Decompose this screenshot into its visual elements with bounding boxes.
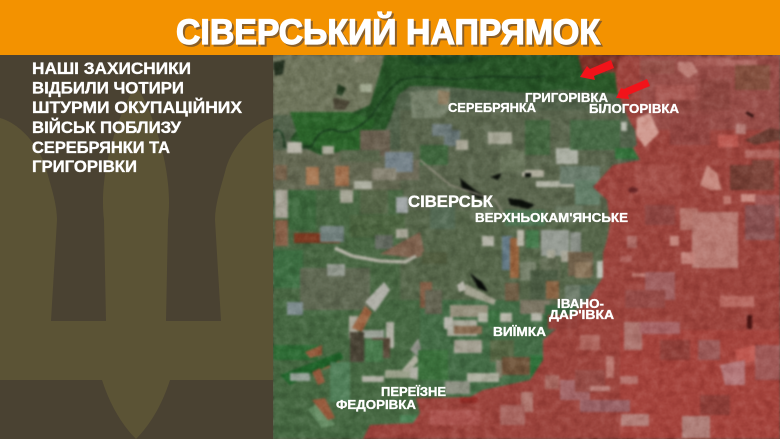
panel text	[32, 60, 242, 176]
title shadow: СІВЕРСЬКИЙ НАПРЯМОК	[178, 14, 603, 54]
label: Fedorivka: ФЕДОРІВКА	[336, 397, 417, 412]
text line 2: ВІДБИЛИ ЧОТИРИ	[32, 80, 184, 98]
icon: trident emblem	[0, 85, 273, 439]
label: Verkhnokamianske: ВЕРХНЬОКАМ'ЯНСЬКЕ	[475, 210, 628, 225]
occupied territory	[363, 55, 780, 439]
text line 6: ГРИГОРІВКИ	[32, 158, 137, 176]
text line 5: СЕРЕБРЯНКИ ТА	[32, 139, 170, 157]
red zone fields	[640, 55, 780, 130]
dark spots	[628, 187, 638, 193]
fields central north	[432, 124, 452, 136]
label: Bilohorivka: БІЛОГОРІВКА	[589, 101, 680, 116]
road from Siversk	[419, 158, 505, 218]
arrows	[580, 60, 650, 99]
left panel	[0, 55, 273, 439]
label: Siversk: СІВЕРСЬК	[408, 193, 494, 211]
label: Hryhorivka: ГРИГОРІВКА	[525, 90, 609, 105]
label: Ivano-Darivka line 2: ДАР'ІВКА	[549, 307, 615, 322]
text line 1: НАШІ ЗАХИСНИКИ	[32, 60, 191, 78]
label: Serebrianka: СЕРЕБРЯНКА	[448, 100, 537, 115]
forest	[290, 55, 622, 155]
arrow: toward Bilohorivka	[616, 79, 650, 99]
terrain fields	[273, 55, 780, 439]
satellite map	[273, 55, 780, 439]
title banner	[0, 0, 780, 55]
label: Pereizne: ПЕРЕЇЗНЕ	[381, 384, 446, 399]
photo grain	[273, 55, 780, 439]
fields east of Siversk	[482, 236, 494, 246]
arrow: toward Hryhorivka	[580, 60, 614, 80]
text line 4: ВІЙСЬК ПОБЛИЗУ	[32, 118, 182, 137]
fields south centre	[420, 282, 432, 308]
map labels	[336, 90, 680, 412]
title: СІВЕРСЬКИЙ НАПРЯМОК	[176, 12, 601, 52]
label: Ivano-Darivka line 1: ІВАНО-	[557, 296, 604, 311]
text line 3: ШТУРМИ ОКУПАЦІЙНИХ	[32, 98, 242, 117]
label: Vyimka: ВИЇМКА	[493, 324, 547, 339]
fields west	[275, 190, 288, 218]
dark ponds	[460, 178, 488, 199]
river	[273, 76, 545, 148]
